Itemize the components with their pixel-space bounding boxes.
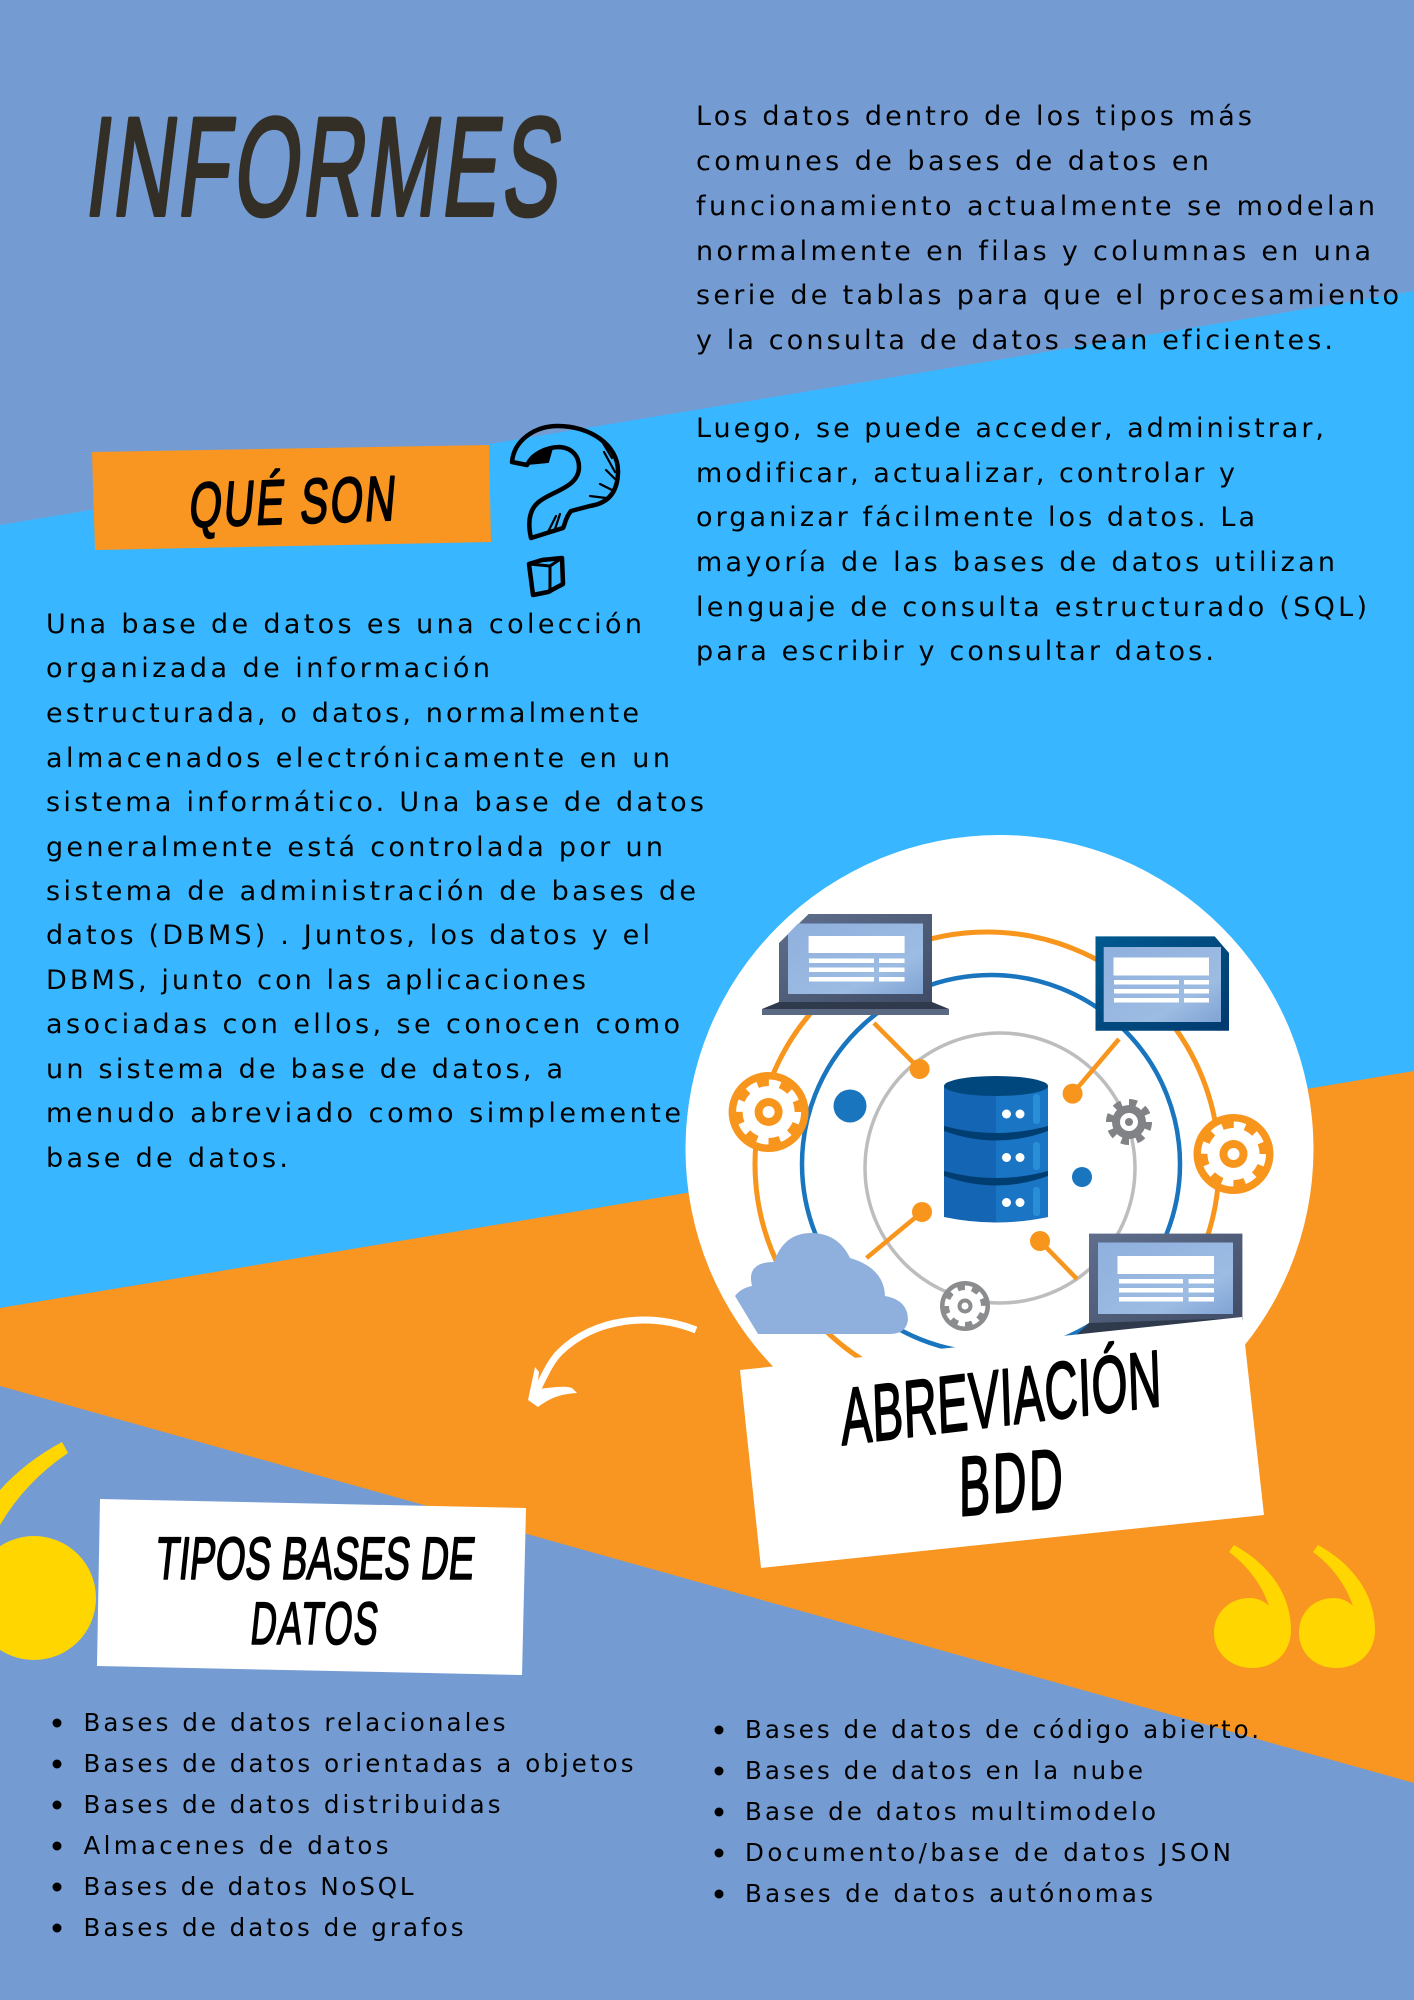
title: INFORMES [79,88,571,245]
text block: intro paragraph right: normalmente en filas y columnas en una [696,236,1371,267]
icon: question mark [512,426,618,595]
heading: tipos bases de datos: TIPOS BASES DE [153,1524,478,1592]
heading: tipos bases de datos: DATOS [248,1590,382,1657]
arrow: white curved arrow [528,1320,696,1407]
list: database types left: Bases de datos distribuidas [84,1790,500,1819]
text block: definition paragraph: almacenados electrónicamente en un [46,743,670,774]
text block: second paragraph right: organizar fácilmente los datos. La [696,502,1255,533]
text block: second paragraph right: lenguaje de consulta estructurado (SQL) [696,592,1367,623]
text block: intro paragraph right: funcionamiento actualmente se modelan [696,191,1375,222]
list: database types right: Bases de datos de código abierto. [745,1715,1259,1744]
icon: right orange gear [1194,1114,1274,1194]
text block: definition paragraph: datos (DBMS) . Juntos, los datos y el [46,920,650,951]
text block: second paragraph right: mayoría de las bases de datos utilizan [696,547,1335,578]
heading: qué son [92,445,491,550]
text block: definition paragraph: Una base de datos es una colección [46,609,642,640]
illustration: database network in white circle [686,835,1314,1463]
callout: abreviación BDD: ABREVIACIÓN [839,1333,1163,1462]
text block: definition paragraph [46,609,704,1174]
icon: bottom grey gear [940,1281,990,1331]
icon: cloud [735,1233,908,1334]
background: blue band [0,291,1414,1308]
text block: definition paragraph: menudo abreviado como simplemente [46,1098,681,1129]
list: database types right: Bases de datos autónomas [745,1879,1153,1908]
text block: intro paragraph right: comunes de bases de datos en [696,146,1209,177]
icon: left orange gear [729,1072,809,1152]
list: database types left: Bases de datos NoSQL [84,1872,414,1901]
text block: definition paragraph: generalmente está controlada por un [46,832,663,863]
text block: definition paragraph: DBMS, junto con las aplicaciones [46,965,586,996]
text block: definition paragraph: un sistema de base de datos, a [46,1054,563,1085]
rings [755,932,1219,1396]
icon: left yellow quote mark [0,1442,96,1660]
icon: top-right tablet [1096,936,1229,1031]
list: database types left: Bases de datos orientadas a objetos [84,1749,633,1778]
list: database types left: Bases de datos relacionales [84,1708,505,1737]
list: database types left: Almacenes de datos [84,1831,388,1860]
text block: second paragraph right: modificar, actualizar, controlar y [696,458,1235,489]
text block: definition paragraph: sistema informático. Una base de datos [46,787,704,818]
text block: definition paragraph: asociadas con ellos, se conocen como [46,1009,680,1040]
list: database types right [714,1715,1259,1908]
callout: abreviación BDD [740,1317,1264,1568]
background: orange band [0,1071,1414,1783]
list: database types right: Bases de datos en la nube [745,1756,1143,1785]
text block: definition paragraph: base de datos. [46,1143,288,1174]
text block: definition paragraph: estructurada, o datos, normalmente [46,698,639,729]
blue dots [834,1090,866,1122]
icon: small grey gear [1110,1103,1148,1141]
list: database types left [52,1708,633,1942]
icon: bottom-right laptop [1071,1234,1242,1340]
list: database types right: Base de datos multimodelo [745,1797,1156,1826]
text block: second paragraph right: Luego, se puede acceder, administrar, [696,413,1324,444]
text block: definition paragraph: sistema de administración de bases de [46,876,696,907]
heading: tipos bases de datos [97,1499,526,1675]
callout: abreviación BDD: BDD [959,1432,1063,1535]
text block: definition paragraph: organizada de información [46,653,490,684]
list: database types left: Bases de datos de grafos [84,1913,464,1942]
icon: top-left laptop [762,914,949,1015]
connectors [866,1023,1119,1279]
heading: qué son: QUÉ SON [187,463,399,541]
list: database types right: Documento/base de datos JSON [745,1838,1231,1867]
icon: right yellow quote marks [1214,1545,1375,1668]
icon: database [944,1076,1048,1222]
text block: second paragraph right: para escribir y consultar datos. [696,636,1214,667]
text block: intro paragraph right [696,101,1399,356]
text block: intro paragraph right: y la consulta de datos sean eficientes. [696,325,1333,356]
text block: second paragraph right [696,413,1367,667]
text block: intro paragraph right: Los datos dentro de los tipos más [696,101,1252,132]
text block: intro paragraph right: serie de tablas para que el procesamiento [696,280,1399,311]
